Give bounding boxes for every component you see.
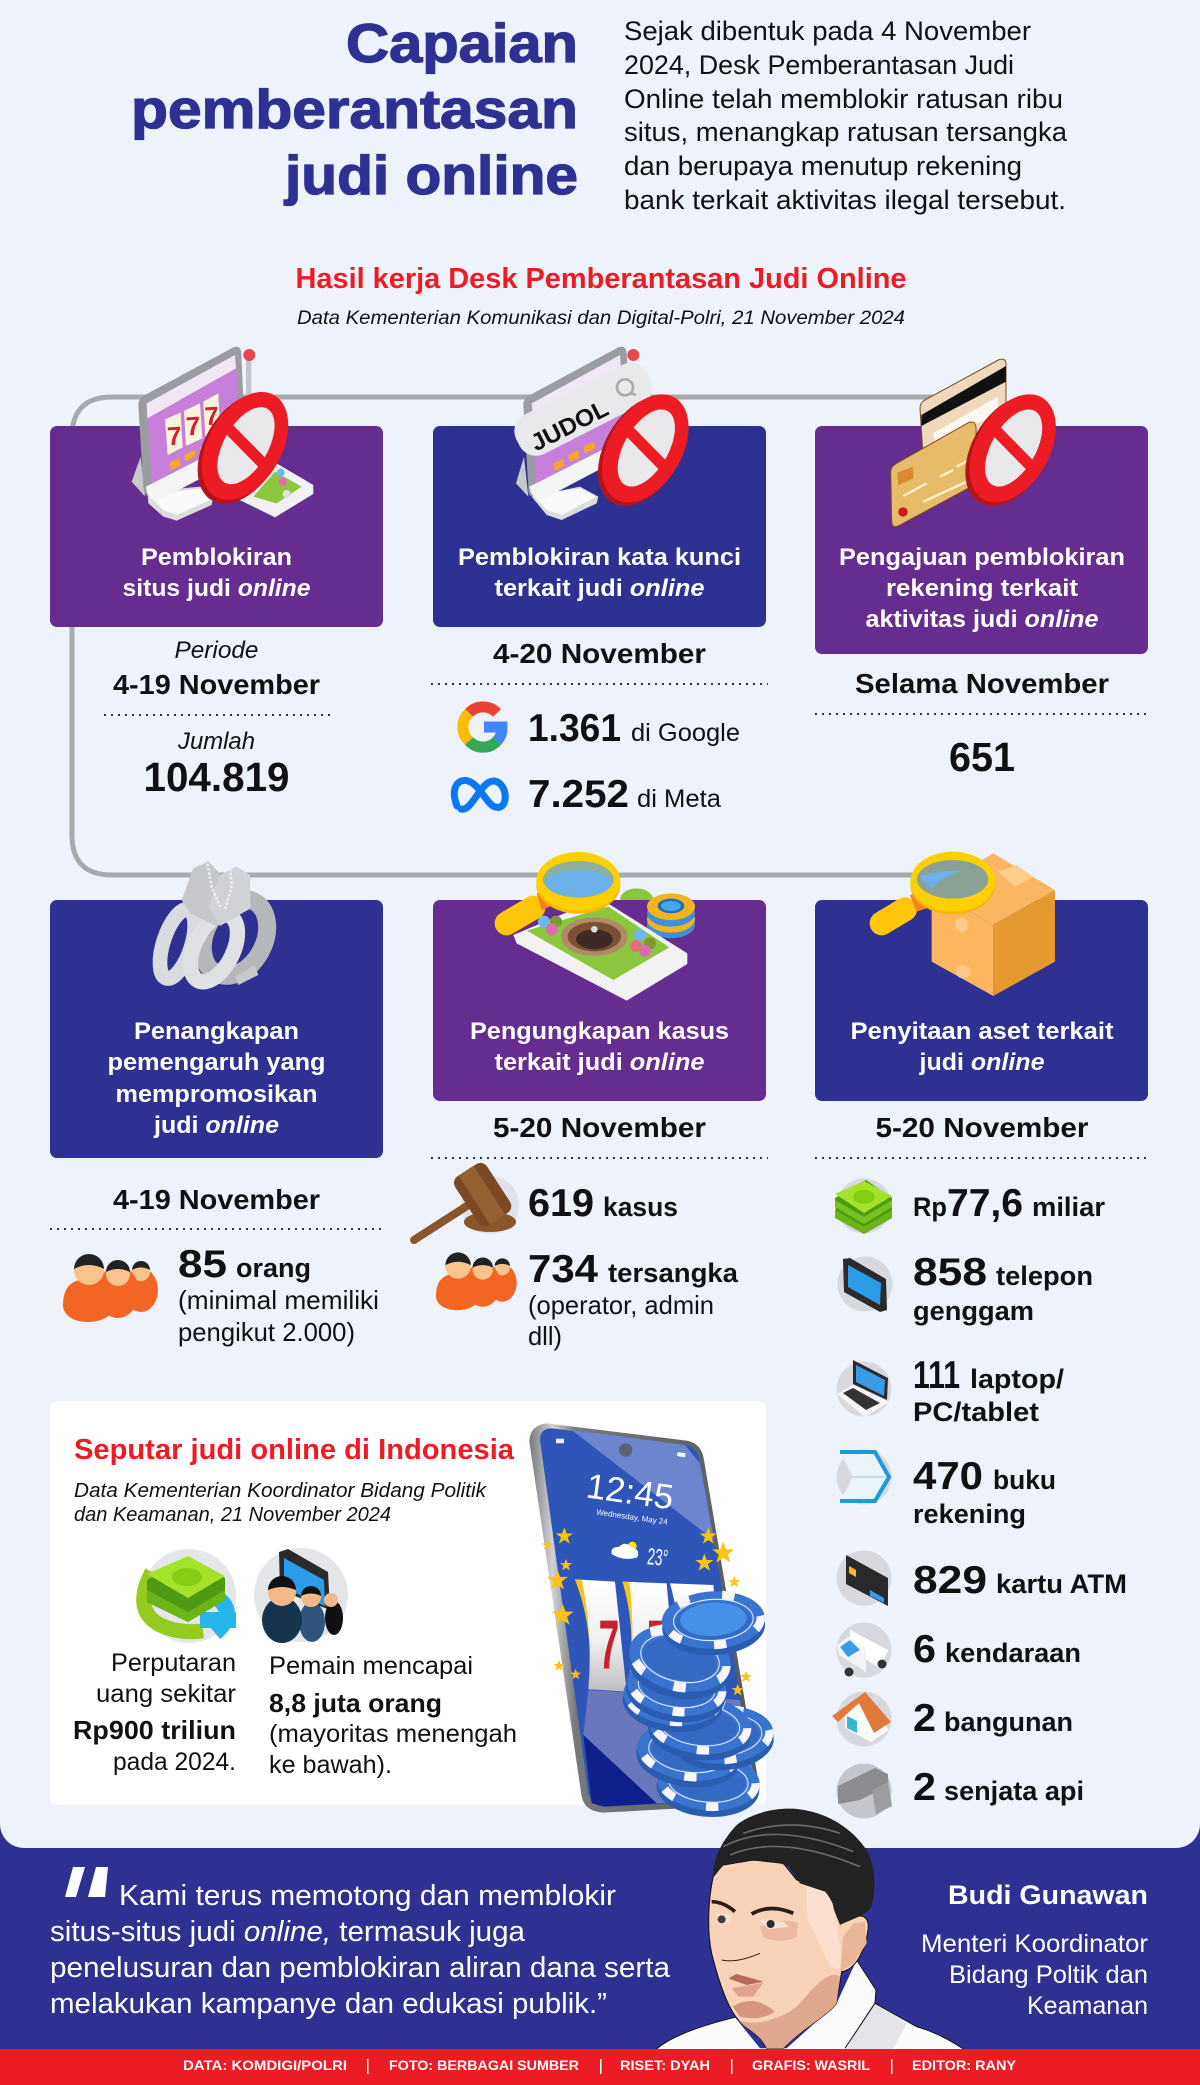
panel: pengungkapan [414,852,768,1351]
box title: Pengajuan pemblokiran [839,544,1125,571]
icon: box and magnifier [882,852,1055,996]
section heading: Hasil kerja Desk Pemberantasan Judi Online [296,263,906,295]
box [815,900,1148,1101]
panel: penyitaan aset: judi online [918,1049,1044,1076]
text: perputaran: Perputaran [111,1649,236,1677]
stat: meta: di Meta [637,785,721,813]
stat: kasus [528,1182,678,1225]
text: perputaran: Rp900 triliun [73,1715,236,1745]
title [131,12,578,206]
date: 5-20 November [493,1112,706,1143]
stat: buku: rekening [913,1499,1026,1529]
stat: orang: (minimal memiliki [178,1285,379,1315]
amount label: Jumlah [177,728,255,755]
icon: blocked keyword monitor [508,347,706,521]
stat: tersangka: 734 [528,1248,598,1291]
stat: meta: 7.252 [528,773,629,816]
speaker role: Menteri Koordinator [921,1930,1148,1958]
stat: atm [913,1559,1127,1602]
intro text: Sejak dibentuk pada 4 November [624,16,1031,46]
stat: kendaraan: kendaraan [945,1638,1081,1668]
stat: kasus: 619 [528,1182,594,1225]
stat: uang [913,1182,1105,1225]
stat: buku: 470 [913,1455,983,1498]
stat: atm: kartu ATM [996,1569,1127,1599]
white card [50,1401,766,1805]
connector line [72,397,935,875]
text: perputaran: uang sekitar [96,1680,236,1708]
intro text: situs, menangkap ratusan tersangka [624,117,1068,147]
stat: uang: 77,6 [947,1182,1023,1225]
stat: kendaraan: 6 [913,1628,936,1671]
quote text: Kami terus memotong dan memblokir [119,1880,616,1912]
stat: telepon: telepon [996,1261,1093,1291]
stat: tersangka: tersangka [608,1258,739,1288]
stat: orang: pengikut 2.000) [178,1317,355,1347]
intro text: dan berupaya menutup rekening [624,151,1022,181]
stat: kendaraan [913,1628,1081,1671]
stat: tersangka: (operator, admin [528,1290,714,1320]
stat: google: 1.361 [528,707,621,750]
stat: laptop: PC/tablet [913,1397,1039,1427]
panel: kata kunci [431,347,768,816]
icon: handcuffs [153,859,280,989]
box [815,426,1148,654]
stat: bangunan: 2 [913,1697,936,1740]
footer credits: DATA: KOMDIGI/POLRI [183,2057,347,2073]
illustration: phone with chips: Wednesday, May 24 [596,1508,669,1527]
intro text: bank terkait aktivitas ilegal tersebut. [624,185,1066,215]
stat: uang: miliar [1032,1192,1105,1222]
box title: Penangkapan [134,1018,299,1045]
panel: penangkapan: mempromosikan [116,1081,318,1108]
intro text: 2024, Desk Pemberantasan Judi [624,50,1014,80]
box title: Pengungkapan kasus [470,1018,729,1045]
stat: senjata: senjata api [944,1776,1084,1806]
footer credits: GRAFIS: WASRIL [752,2057,870,2073]
footer credits: RISET: DYAH [620,2057,710,2073]
quote text: penelusuran dan pemblokiran aliran dana serta [50,1952,671,1984]
panel: rekening [815,359,1150,780]
panel: situs [50,347,383,800]
stat: bangunan [913,1697,1073,1740]
icon: players [254,1548,348,1643]
icon: blocked keyword monitor: JUDOL [526,395,613,457]
footer credits [0,2049,1200,2085]
stat: orang [178,1243,379,1347]
stat: telepon: genggam [913,1296,1034,1326]
icon: laptop [836,1360,892,1417]
panel: pengungkapan: terkait judi online [494,1049,704,1076]
stat: bangunan: bangunan [944,1707,1073,1737]
title: pemberantasan [131,78,578,140]
box [433,900,766,1101]
icon: google [463,707,502,747]
text: pemain: 8,8 juta orang [269,1688,442,1718]
stat: google [528,707,740,750]
icon: gavel [414,1160,519,1240]
stat: kasus: kasus [603,1192,678,1222]
icon: blocked monitor: 7 [185,410,201,441]
text: pemain: Pemain mencapai [269,1652,473,1680]
date: 4-20 November [493,638,706,669]
card source [74,1480,487,1526]
date: 5-20 November [876,1112,1089,1143]
stat: meta [528,773,721,816]
section heading [296,263,906,329]
stat: laptop: laptop/ [970,1364,1065,1394]
icon: money turnover [142,1549,236,1643]
stat: laptop: 111 [913,1354,960,1397]
amount: 104.819 [144,754,290,800]
text: perputaran: pada 2024. [113,1748,236,1776]
stat: senjata [913,1766,1084,1809]
panel: rekening: aktivitas judi online [866,606,1098,633]
panel: penangkapan [50,859,385,1347]
icon: atm card [836,1550,892,1606]
icon: blocked monitor [132,347,313,521]
stat: buku: buku [993,1465,1056,1495]
icon: truck [836,1622,892,1678]
text: pemain: ke bawah). [269,1751,392,1779]
box title: Penyitaan aset terkait [850,1018,1114,1045]
icon: blocked monitor: 7 [166,420,183,451]
text: pemain [269,1652,517,1779]
speaker name: Budi Gunawan [948,1880,1148,1910]
icon: house [832,1692,892,1746]
stat: orang: orang [236,1253,311,1283]
box [50,900,383,1158]
date: Selama November [855,668,1109,699]
title: Capaian [346,12,578,74]
date: 4-19 November [113,1184,320,1215]
panel: penangkapan: pemengaruh yang [108,1049,326,1076]
amount: 651 [949,734,1015,780]
icon: people [436,1252,517,1310]
stat: laptop [913,1354,1065,1427]
illustration: phone with chips: 7 [599,1605,619,1683]
icon: meta [454,780,505,809]
panel: situs: situs judi online [122,575,310,602]
intro text: Online telah memblokir ratusan ribu [624,84,1063,114]
text: pemain: (mayoritas menengah [269,1720,517,1748]
quote text [50,1880,671,2020]
illustration: phone with chips: 23° [646,1543,669,1571]
box [433,426,766,627]
title: judi online [284,144,578,206]
panel: penyitaan aset [815,852,1150,1818]
intro text [624,16,1068,215]
portrait [657,1809,963,2049]
card heading: Seputar judi online di Indonesia [74,1434,515,1466]
icon: blocked monitor: 7 [204,400,220,431]
box [50,426,383,627]
illustration: phone with chips [529,1423,776,1820]
box title: Pemblokiran kata kunci [458,544,741,571]
icon: phone [838,1256,892,1312]
icon: money [835,1178,892,1234]
text: perputaran [73,1649,236,1776]
illustration: phone with chips: 12:45 [584,1467,676,1517]
date: 4-19 November [113,669,320,700]
speaker role [921,1930,1148,2020]
illustration: phone with chips: 7 [647,1605,668,1683]
stat: senjata: 2 [913,1766,936,1809]
icon: blocked cards [891,359,1074,527]
period: Periode [174,637,258,664]
panel: rekening: rekening terkait [886,575,1078,602]
quote mark [65,1867,108,1897]
box title: Pemblokiran [141,544,292,571]
stat: telepon: 858 [913,1251,987,1294]
stat: uang: Rp [913,1192,947,1222]
icon: bank book [836,1450,892,1504]
panel: quote [50,1809,1148,2049]
quote text: melakukan kampanye dan edukasi publik.” [50,1988,607,2020]
stat: atm: 829 [913,1559,987,1602]
footer credits: EDITOR: RANY [912,2057,1017,2073]
stat: telepon [913,1251,1093,1326]
stat: buku [913,1455,1056,1529]
quote text: situs-situs judi online, termasuk juga [50,1916,526,1948]
icon: phone roulette and magnifier [507,852,695,1001]
stat: tersangka [528,1248,739,1351]
panel: seputar judi online [50,1401,776,1820]
footer credits: FOTO: BERBAGAI SUMBER [389,2057,579,2073]
panel: kata kunci: terkait judi online [494,575,704,602]
panel: penangkapan: judi online [153,1112,279,1139]
card source: Data Kementerian Koordinator Bidang Politik [74,1480,487,1502]
icon: people [63,1254,158,1322]
stat: tersangka: dll) [528,1321,562,1351]
speaker role: Bidang Poltik dan [949,1961,1148,1989]
stat: google: di Google [631,719,740,747]
section heading: Data Kementerian Komunikasi dan Digital-Polri, 21 November 2024 [297,308,905,329]
speaker role: Keamanan [1027,1992,1148,2020]
icon: handgun [836,1764,892,1818]
stat: orang: 85 [178,1243,227,1286]
card source: dan Keamanan, 21 November 2024 [74,1504,391,1526]
